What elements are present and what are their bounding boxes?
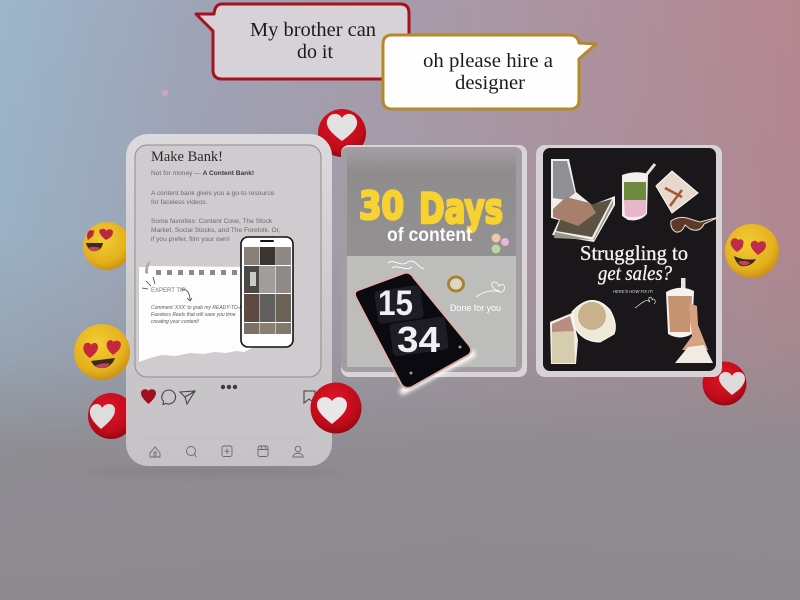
- text block: content bank copy: for faceless videos.: [151, 199, 208, 206]
- icon: heart balloon lower left: [88, 393, 134, 439]
- torn paper note: Faceless Reels that will save you time: [151, 312, 236, 318]
- callout: My brother can do it: [196, 4, 409, 79]
- headline: Struggling to get sales: get sales?: [598, 261, 672, 285]
- text block: content bank copy: Market, Social Stocks, and The Forefolk. Or,: [151, 227, 280, 234]
- text block: content bank copy: A content bank gives you a go-to resource: [151, 190, 274, 197]
- sticker: sunglasses: [671, 217, 719, 232]
- title: 30 Days: Days: [419, 184, 503, 233]
- sticker: pastry: [656, 171, 698, 213]
- torn paper note: EXPERT TIP: [151, 288, 186, 294]
- icon: heart balloon top: [318, 109, 366, 157]
- headline: Struggling to get sales: [580, 241, 688, 285]
- torn paper note: creating your content!: [151, 319, 200, 325]
- icon: heart-eyes emoji right: [725, 224, 779, 278]
- small caption: HERE'S HOW FIX IT!: [613, 289, 654, 294]
- callout: oh please hire a designer: oh please hire a: [423, 51, 553, 72]
- title: 30 Days: 30: [359, 184, 404, 228]
- text block: content bank copy: Some favorites: Content Cove, The Stock: [151, 218, 273, 225]
- squiggle doodle: [388, 261, 424, 269]
- sticker: coffee cup: [550, 300, 615, 364]
- callout: oh please hire a designer: [383, 35, 596, 109]
- gold ring: [448, 277, 464, 291]
- heading: Make Bank: Make Bank!: [151, 149, 223, 165]
- subtitle: of content: of content: [387, 225, 473, 246]
- sticker: bubble tea in hand: [666, 278, 713, 363]
- heart doodle: [635, 297, 655, 308]
- label: Done for you: Done for you: [450, 303, 501, 313]
- icon: heart-eyes emoji upper left: [83, 222, 131, 270]
- title: 30 Days: [359, 184, 503, 233]
- panel: struggling to get sales card: [536, 145, 722, 377]
- icon: heart balloon right of phone: [310, 382, 362, 434]
- headline: Struggling to get sales: Struggling to: [580, 241, 688, 265]
- callout: My brother can do it: My brother can: [250, 20, 376, 41]
- panel: 30 days of content card: [341, 145, 527, 391]
- bottom navigation icons: [140, 438, 310, 457]
- mini phone with reels grid: [241, 237, 293, 347]
- text block: content bank copy: Not for money — A Content Bank!: [151, 170, 254, 177]
- clock digits: 15: [378, 284, 413, 323]
- icon: heart-eyes emoji lower left: [74, 324, 130, 380]
- torn paper note: [139, 261, 255, 362]
- pagination dots: [221, 385, 237, 389]
- sticker: matcha drink: [622, 164, 655, 220]
- callout: My brother can do it: do it: [297, 42, 334, 63]
- icon: heart balloon lower right: [702, 362, 746, 406]
- torn paper note: Comment 'XXX' to grab my READY-TO-POST: [151, 305, 254, 311]
- heart doodle: [476, 282, 505, 297]
- text block: content bank copy: [151, 170, 280, 243]
- phone with flip clock: [355, 273, 472, 391]
- action icons: like, comment, share, save: [141, 389, 315, 404]
- phone with flip clock: 34: [397, 319, 440, 360]
- text block: content bank copy: if you prefer, film your own!: [151, 236, 230, 243]
- callout: oh please hire a designer: designer: [455, 73, 526, 94]
- flower stickers: [492, 234, 509, 254]
- panel: phone mockup card: [126, 134, 332, 466]
- sticker: laptop and hands: [551, 159, 615, 242]
